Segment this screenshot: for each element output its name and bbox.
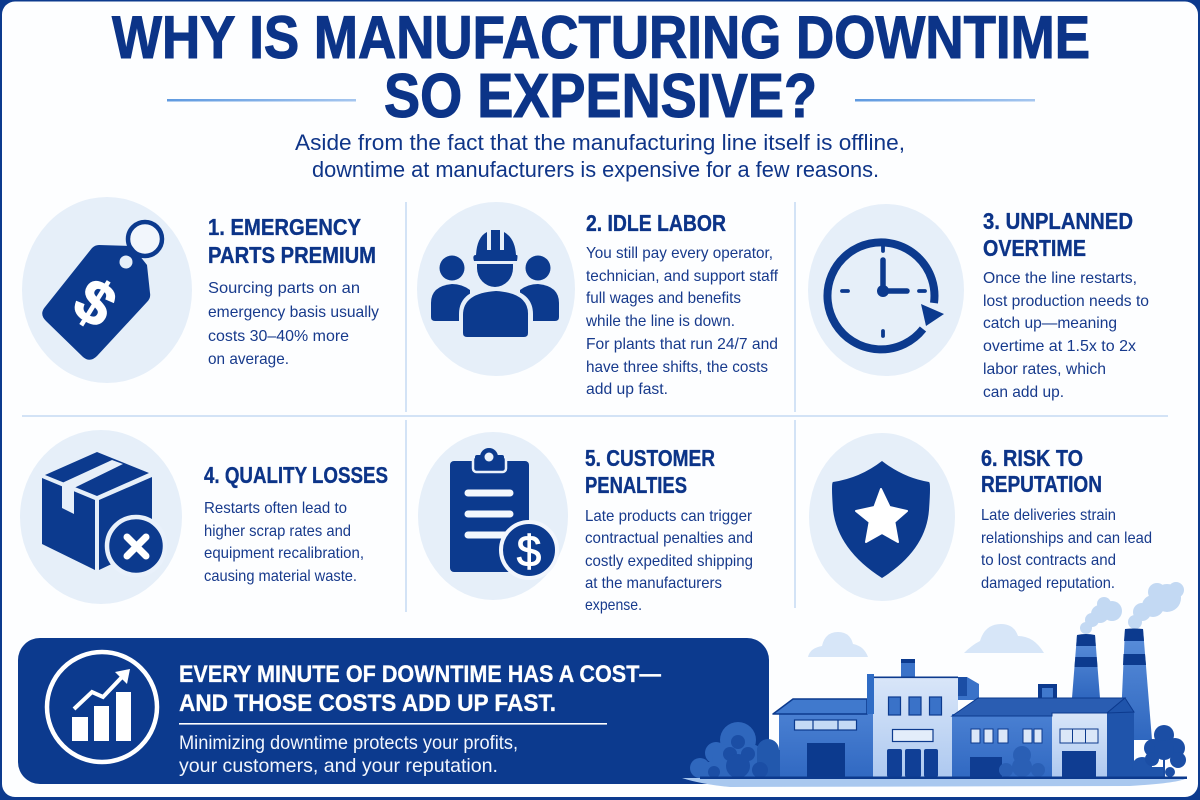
heading: 6. RISK TO <box>981 445 1083 471</box>
panel: quality losses <box>20 430 388 604</box>
body text: at the manufacturers <box>585 575 722 592</box>
heading <box>981 445 1102 497</box>
body text: lost production needs to <box>983 293 1149 310</box>
heading: 1. EMERGENCY <box>208 214 361 240</box>
icon: shield with star <box>809 433 955 601</box>
heading: PENALTIES <box>585 472 687 498</box>
body text: technician, and support staff <box>586 268 779 285</box>
body text: have three shifts, the costs <box>586 359 768 376</box>
icon: growth chart <box>47 652 157 762</box>
smoke <box>1080 582 1184 634</box>
body text: add up fast. <box>586 381 668 398</box>
heading: 4. QUALITY LOSSES <box>204 462 388 488</box>
panel: customer penalties <box>418 432 753 614</box>
body text: costs 30–40% more <box>208 328 349 345</box>
body text: higher scrap rates and <box>204 523 351 540</box>
body text <box>585 245 779 398</box>
panel: idle labor <box>417 202 779 398</box>
banner headline: EVERY MINUTE OF DOWNTIME HAS A COST— <box>179 661 661 688</box>
right factory <box>952 684 1134 777</box>
illustration: factory skyline <box>682 582 1187 787</box>
body text <box>585 508 753 614</box>
body text: Sourcing parts on an <box>208 280 360 297</box>
center building <box>867 659 979 777</box>
title: SO EXPENSIVE? <box>384 62 817 131</box>
ground <box>682 778 1187 787</box>
title: WHY IS MANUFACTURING DOWNTIME <box>112 4 1090 71</box>
icon: price tag <box>22 197 192 383</box>
icon: clipboard with dollar <box>418 432 568 600</box>
icon: damaged box <box>20 430 182 604</box>
subtitle: Aside from the fact that the manufacturing line itself is offline, <box>295 130 905 155</box>
body text: full wages and benefits <box>586 290 741 307</box>
body text: Once the line restarts, <box>983 270 1137 287</box>
body text: For plants that run 24/7 and <box>586 336 778 353</box>
panel: risk to reputation <box>809 433 1152 601</box>
icon: clipboard with dollar: $ <box>517 527 541 576</box>
body text: on average. <box>208 351 289 368</box>
banner headline: AND THOSE COSTS ADD UP FAST. <box>179 690 556 717</box>
callout banner <box>18 638 769 784</box>
heading <box>208 214 376 268</box>
icon: workers <box>417 202 575 376</box>
body text: expense. <box>585 597 642 614</box>
heading: REPUTATION <box>981 471 1102 497</box>
heading: 3. UNPLANNED <box>983 208 1133 234</box>
body text <box>981 507 1152 592</box>
body text: to lost contracts and <box>981 552 1116 569</box>
trees <box>690 722 1186 778</box>
body text: equipment recalibration, <box>204 545 364 562</box>
body text: Late products can trigger <box>585 508 753 525</box>
body text: contractual penalties and <box>585 530 753 547</box>
body text: catch up—meaning <box>983 315 1117 332</box>
banner text: Minimizing downtime protects your profits, <box>179 732 518 754</box>
subtitle <box>295 130 905 182</box>
body text: Late deliveries strain <box>981 507 1116 524</box>
body text: relationships and can lead <box>981 530 1152 547</box>
panel: emergency parts premium <box>22 197 379 383</box>
heading: 2. IDLE LABOR <box>586 210 726 236</box>
banner headline <box>179 661 661 717</box>
heading: 5. CUSTOMER <box>585 445 715 471</box>
title <box>112 4 1090 131</box>
warehouse <box>773 699 873 777</box>
heading <box>585 445 715 498</box>
body text: costly expedited shipping <box>585 553 753 570</box>
body text: overtime at 1.5x to 2x <box>983 338 1136 355</box>
body text: Restarts often lead to <box>204 500 347 517</box>
icon: price tag: $ <box>62 265 128 342</box>
body text: labor rates, which <box>983 361 1106 378</box>
body text: causing material waste. <box>204 568 357 585</box>
banner text <box>179 732 518 777</box>
body text <box>208 280 379 368</box>
body text: damaged reputation. <box>981 575 1115 592</box>
heading: PARTS PREMIUM <box>208 242 376 268</box>
body text: emergency basis usually <box>208 304 379 321</box>
body text: can add up. <box>983 384 1064 401</box>
title rule right <box>855 99 1035 102</box>
icon: clock <box>808 204 964 376</box>
heading: OVERTIME <box>983 235 1086 261</box>
banner text: your customers, and your reputation. <box>179 755 498 777</box>
heading <box>983 208 1133 261</box>
body text: You still pay every operator, <box>586 245 773 262</box>
title rule left <box>167 99 356 102</box>
smokestacks <box>1072 628 1152 740</box>
body text <box>204 500 364 585</box>
panel: unplanned overtime <box>808 204 1149 401</box>
clouds <box>808 624 1044 657</box>
body text <box>983 270 1149 401</box>
subtitle: downtime at manufacturers is expensive for a few reasons. <box>312 157 879 182</box>
body text: while the line is down. <box>585 313 735 330</box>
